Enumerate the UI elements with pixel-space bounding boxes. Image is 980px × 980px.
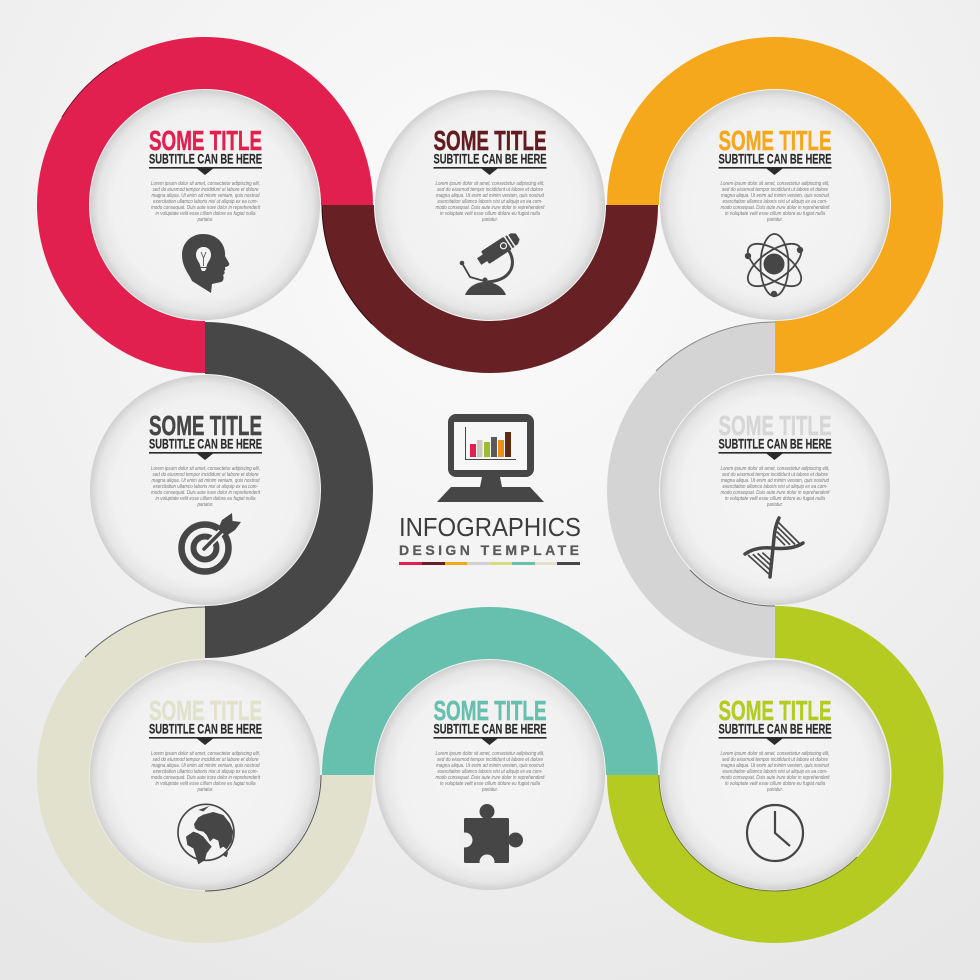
panel: dark gray card (90, 375, 320, 605)
subtitle: SUBTITLE CAN BE HERE (149, 721, 262, 736)
body text: sed do eiusmod tempor incididunt ut labore et dolore (437, 757, 543, 763)
body text (720, 466, 830, 508)
body text: sed do eiusmod tempor incididunt ut labore et dolore (722, 757, 828, 763)
subtitle: SUBTITLE CAN BE HERE (434, 151, 546, 166)
icon: clock (747, 805, 803, 861)
body text: modo consequat. Duis aute irure dolor in reprehenderit (151, 490, 260, 496)
body text: Lorem ipsum dolor sit amet, consectetur adipiscing elit, (720, 751, 830, 757)
body text: modo consequat. Duis aute irure dolor in reprehenderit (720, 490, 830, 496)
body text: magna aliqua. Ut enim ad minim veniam, quis nostrud (436, 193, 545, 199)
icon: dna (745, 518, 803, 577)
body text: exercitation ullamco laboris nisi ut aliquip ex ea com- (722, 199, 828, 205)
ring: maroon (348, 205, 632, 347)
body text: modo consequat. Duis aute irure dolor in reprehenderit (151, 775, 260, 781)
body text: pariatur. (481, 217, 498, 223)
subtitle: SUBTITLE CAN BE HERE (718, 436, 832, 451)
body text: sed do eiusmod tempor incididunt ut labore et dolore (722, 187, 828, 193)
pointer rule (434, 737, 546, 745)
body text: Lorem ipsum dolor sit amet, consectetur adipiscing elit, (720, 181, 830, 187)
color key bar (399, 562, 580, 565)
pointer rule (149, 452, 262, 460)
body text: pariatur. (766, 502, 783, 508)
subtitle: SUBTITLE CAN BE HERE (434, 721, 546, 736)
pointer rule (149, 167, 262, 175)
body text (151, 181, 260, 223)
body text: magna aliqua. Ut enim ad minim veniam, quis nostrud (152, 478, 260, 484)
body text (436, 181, 545, 223)
panel: beige card (90, 660, 321, 891)
title: SOME TITLE (718, 695, 832, 726)
panel: ring segments (63, 63, 918, 917)
pointer rule (434, 167, 546, 175)
subheading: DESIGN TEMPLATE (399, 542, 579, 558)
body text: magna aliqua. Ut enim ad minim veniam, quis nostrud (721, 193, 830, 199)
body text: sed do eiusmod tempor incididunt ut labore et dolore (152, 187, 259, 193)
body text (720, 751, 830, 793)
title: SOME TITLE (149, 695, 262, 726)
body text: pariatur. (766, 217, 783, 223)
body text: sed do eiusmod tempor incididunt ut labore et dolore (152, 472, 259, 478)
icon: microscope (460, 230, 522, 295)
body text: sed do eiusmod tempor incididunt ut labore et dolore (437, 187, 543, 193)
body text: magna aliqua. Ut enim ad minim veniam, quis nostrud (721, 763, 830, 769)
body text: pariatur. (197, 502, 214, 508)
ring: beige (63, 633, 347, 917)
body text: modo consequat. Duis aute irure dolor in reprehenderit (436, 775, 545, 781)
body text: magna aliqua. Ut enim ad minim veniam, quis nostrud (721, 478, 830, 484)
title: SOME TITLE (149, 410, 262, 441)
body text: pariatur. (197, 787, 214, 793)
body text: exercitation ullamco laboris nisi ut aliquip ex ea com- (722, 769, 828, 775)
body text: exercitation ullamco laboris nisi ut aliquip ex ea com- (153, 199, 258, 205)
ring: orange (633, 63, 917, 347)
subtitle: SUBTITLE CAN BE HERE (718, 721, 832, 736)
panel: orange card (660, 90, 890, 320)
body text (720, 181, 830, 223)
ring: dark gray (205, 348, 347, 632)
disc edge line (659, 775, 857, 891)
pointer rule (718, 737, 832, 745)
subtitle: SUBTITLE CAN BE HERE (149, 436, 262, 451)
body text: Lorem ipsum dolor sit amet, consectetur adipiscing elit, (151, 751, 260, 757)
body text: in voluptate velit esse cillum dolore eu fugiat nulla (725, 496, 825, 502)
body text: modo consequat. Duis aute irure dolor in reprehenderit (720, 775, 830, 781)
body text: exercitation ullamco laboris nisi ut aliquip ex ea com- (153, 484, 258, 490)
panel: green card (659, 660, 890, 891)
title: SOME TITLE (434, 125, 546, 156)
body text: in voluptate velit esse cillum dolore eu fugiat nulla (440, 211, 540, 217)
body text: exercitation ullamco laboris nisi ut aliquip ex ea com- (438, 199, 543, 205)
body text: modo consequat. Duis aute irure dolor in reprehenderit (151, 205, 260, 211)
icon: monitor with chart (437, 414, 544, 502)
body text: exercitation ullamco laboris nisi ut aliquip ex ea com- (153, 769, 258, 775)
body text: in voluptate velit esse cillum dolore eu fugiat nulla (725, 781, 825, 787)
ring: light gray (633, 348, 775, 632)
body text: Lorem ipsum dolor sit amet, consectetur adipiscing elit, (151, 181, 260, 187)
ring: teal (348, 633, 632, 775)
body text (436, 751, 545, 793)
icon: puzzle piece (458, 804, 523, 870)
body text: modo consequat. Duis aute irure dolor in reprehenderit (436, 205, 545, 211)
body text: sed do eiusmod tempor incididunt ut labore et dolore (152, 757, 259, 763)
heading: INFOGRAPHICS (399, 512, 581, 542)
ring: green (633, 632, 918, 917)
ring edge lines (62, 62, 775, 657)
disc edge line (690, 570, 775, 606)
body text: pariatur. (766, 787, 783, 793)
body text: pariatur. (197, 217, 214, 223)
body text (151, 751, 260, 793)
icon: globe (178, 804, 234, 864)
panel: maroon card (375, 90, 605, 320)
body text: modo consequat. Duis aute irure dolor in reprehenderit (720, 205, 830, 211)
body text: exercitation ullamco laboris nisi ut aliquip ex ea com- (722, 484, 828, 490)
body text: magna aliqua. Ut enim ad minim veniam, quis nostrud (152, 763, 260, 769)
pointer rule (149, 737, 262, 745)
icon: atom (741, 234, 808, 297)
body text: Lorem ipsum dolor sit amet, consectetur adipiscing elit, (151, 466, 260, 472)
body text: in voluptate velit esse cillum dolore eu fugiat nulla (156, 781, 256, 787)
ring: red (63, 63, 347, 347)
panel: teal card (375, 660, 605, 890)
body text: magna aliqua. Ut enim ad minim veniam, quis nostrud (152, 193, 260, 199)
subtitle: SUBTITLE CAN BE HERE (718, 151, 832, 166)
icon: head with bulb (182, 234, 229, 293)
title: SOME TITLE (149, 125, 262, 156)
panel: center logo (399, 414, 581, 565)
title: SOME TITLE (434, 695, 546, 726)
body text: Lorem ipsum dolor sit amet, consectetur adipiscing elit, (720, 466, 830, 472)
title: SOME TITLE (718, 125, 832, 156)
panel: light gray card (660, 375, 890, 606)
subtitle: SUBTITLE CAN BE HERE (149, 151, 262, 166)
body text (151, 466, 260, 508)
pointer rule (718, 452, 832, 460)
body text: in voluptate velit esse cillum dolore eu fugiat nulla (725, 211, 825, 217)
body text: Lorem ipsum dolor sit amet, consectetur adipiscing elit, (436, 751, 544, 757)
body text: exercitation ullamco laboris nisi ut aliquip ex ea com- (438, 769, 543, 775)
title: SOME TITLE (718, 410, 832, 441)
disc edge line (205, 775, 321, 891)
body text: magna aliqua. Ut enim ad minim veniam, quis nostrud (436, 763, 545, 769)
body text: pariatur. (481, 787, 498, 793)
body text: in voluptate velit esse cillum dolore eu fugiat nulla (156, 496, 256, 502)
panel: red card (90, 90, 320, 320)
body text: in voluptate velit esse cillum dolore eu fugiat nulla (156, 211, 256, 217)
body text: in voluptate velit esse cillum dolore eu fugiat nulla (440, 781, 540, 787)
icon: target with arrow (182, 513, 241, 572)
body text: Lorem ipsum dolor sit amet, consectetur adipiscing elit, (436, 181, 544, 187)
body text: sed do eiusmod tempor incididunt ut labore et dolore (722, 472, 828, 478)
pointer rule (718, 167, 832, 175)
